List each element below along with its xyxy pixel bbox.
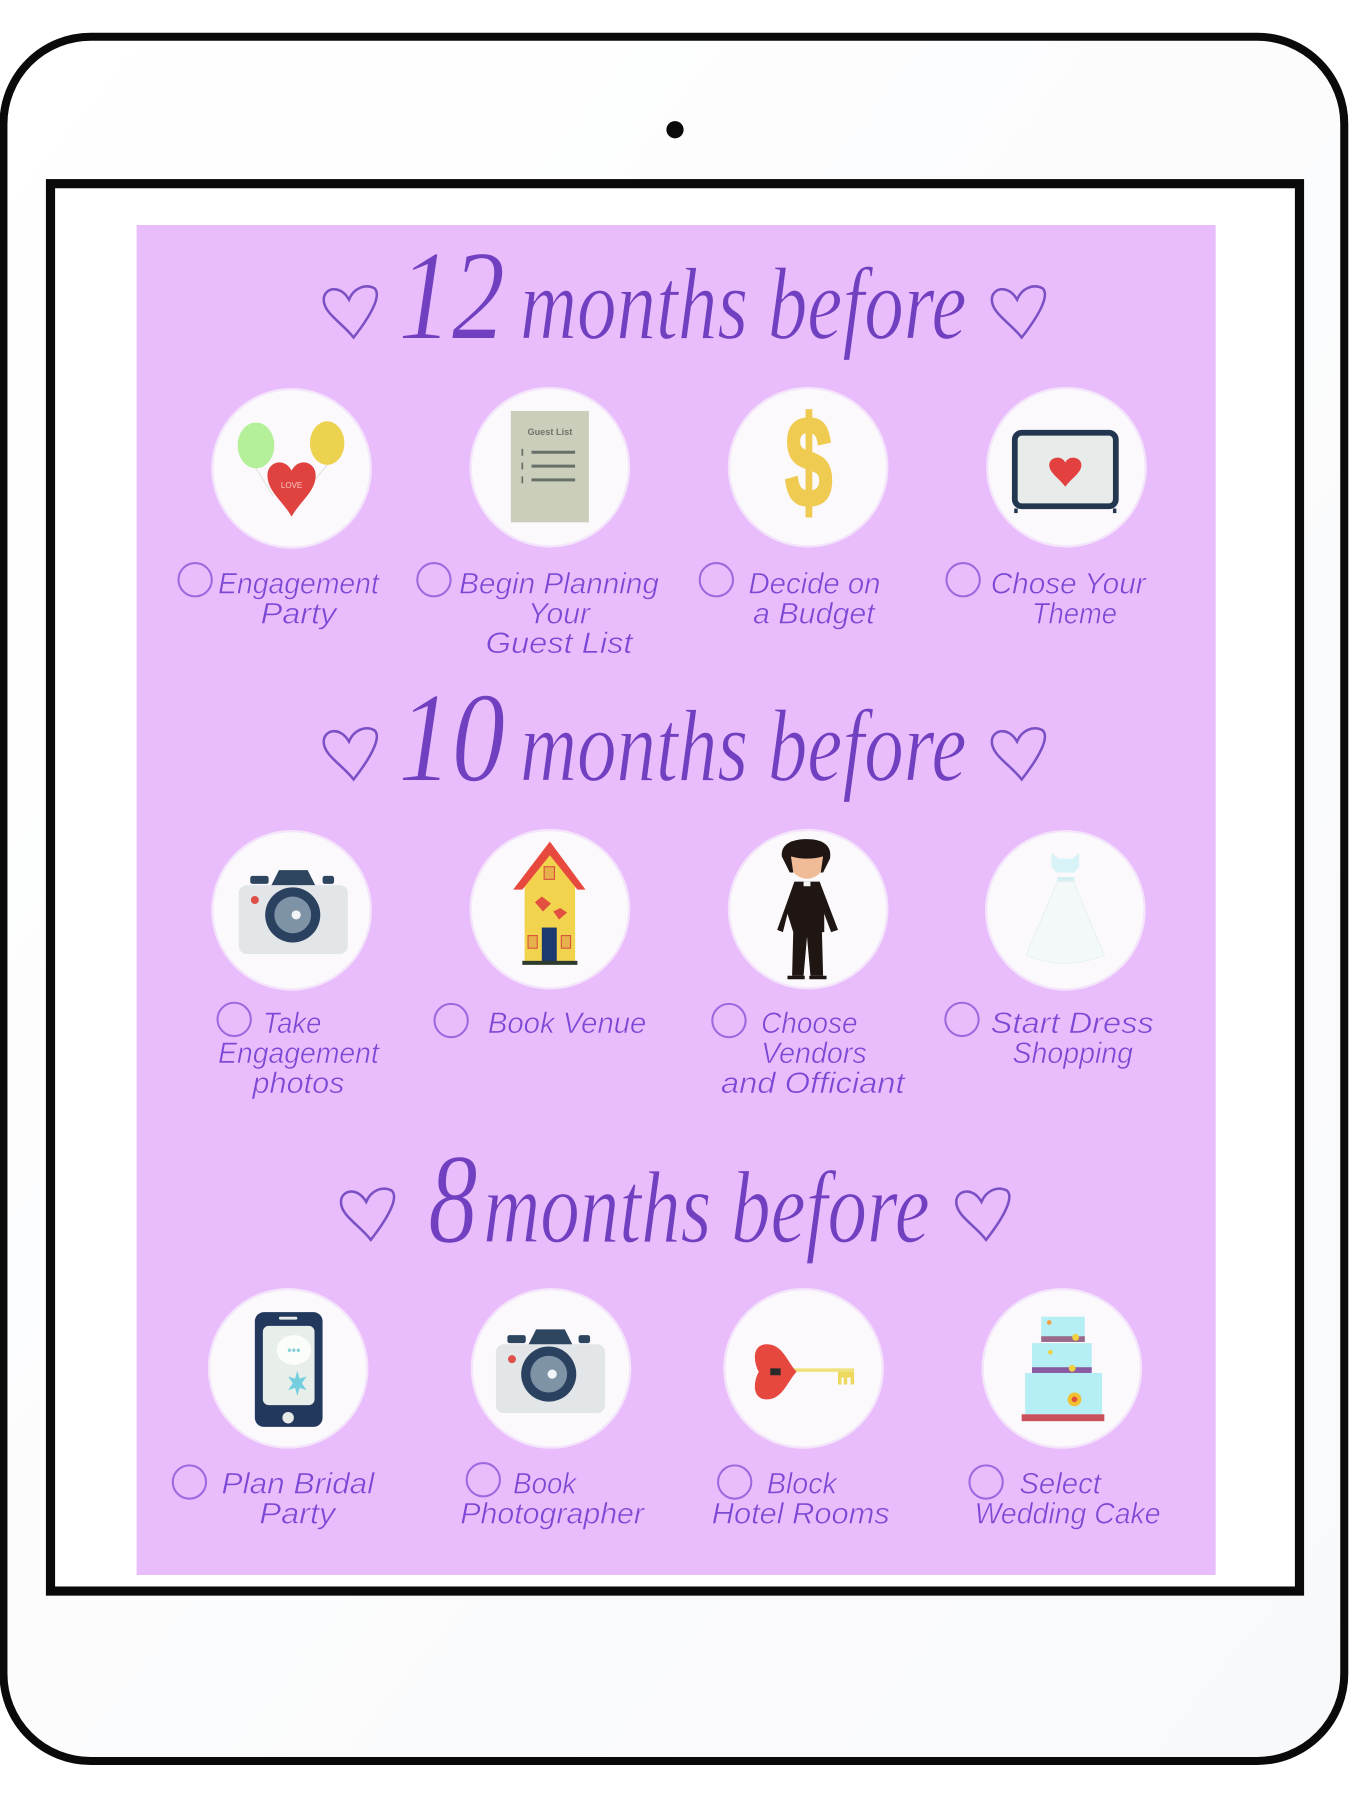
icon: screen with heart [1015, 433, 1116, 513]
heading: 12 months before [324, 224, 1045, 367]
item: engagement party [179, 389, 380, 630]
item: wedding cake [969, 1289, 1161, 1530]
heading: 8 months before: months before [483, 1151, 930, 1265]
heading: 8 months before: 8 [428, 1127, 478, 1270]
icon: house [513, 841, 585, 965]
item: engagement photos [212, 831, 380, 1100]
item: vendors and officiant [712, 830, 906, 1100]
icon: heart key [755, 1344, 854, 1399]
camera dot [666, 121, 684, 138]
tablet screen frame [51, 184, 1299, 1591]
item: dress shopping [945, 831, 1154, 1070]
icon: balloons [238, 421, 344, 517]
item: budget: a Budget [753, 597, 876, 630]
item: venue: Book Venue [488, 1007, 646, 1040]
item: theme: Chose Your [991, 567, 1147, 600]
icon: officiant figure [777, 839, 838, 979]
icon: camera [239, 870, 348, 954]
item: hotel rooms [712, 1289, 890, 1530]
heading: 10 months before: 10 [398, 666, 505, 809]
item: guest list: Begin Planning [459, 567, 659, 600]
item: dress shopping: Shopping [1013, 1037, 1133, 1070]
item: wedding cake: Select [1019, 1467, 1103, 1500]
icon: phone [255, 1312, 323, 1427]
section: 10 months before [212, 666, 1154, 1100]
item: hotel rooms: Hotel Rooms [712, 1497, 890, 1530]
item: engagement photos: photos [252, 1067, 344, 1100]
heading: 12 months before: 12 [398, 224, 505, 367]
item: engagement photos: Engagement [218, 1037, 380, 1070]
item: hotel rooms: Block [767, 1467, 839, 1500]
item: guest list: Guest List [486, 627, 634, 660]
item: photographer: Book [513, 1467, 578, 1500]
item: photographer [460, 1289, 645, 1530]
item: budget [700, 388, 887, 630]
panel: checklist background [137, 225, 1216, 1575]
section: 12 months before [179, 224, 1147, 660]
icon: wedding dress [1026, 853, 1104, 963]
heading: 8 months before [341, 1127, 1009, 1270]
icon: dollar sign: $ [785, 391, 832, 534]
item: budget: Decide on [748, 567, 880, 600]
item: dress shopping: Start Dress [991, 1007, 1154, 1040]
item: engagement party: Engagement [218, 567, 380, 600]
item: vendors and officiant: Vendors [761, 1037, 867, 1070]
item: engagement party: Party [261, 597, 339, 630]
icon: guest list: Guest List [527, 427, 572, 437]
item: guest list [417, 388, 659, 660]
item: guest list: Your [528, 597, 591, 630]
section: 8 months before [173, 1127, 1161, 1530]
item: bridal party: Party [259, 1497, 337, 1530]
item: vendors and officiant: and Officiant [721, 1067, 906, 1100]
item: bridal party [173, 1289, 376, 1530]
item: theme: Theme [1032, 597, 1117, 630]
heading: 10 months before [324, 666, 1045, 809]
icon: camera [496, 1329, 605, 1413]
icon: phone: ••• [287, 1344, 301, 1358]
icon: cake [1022, 1317, 1104, 1421]
item: vendors and officiant: Choose [761, 1007, 858, 1040]
item: photographer: Photographer [460, 1497, 645, 1530]
icon: guest list [511, 411, 589, 522]
heading: 12 months before: months before [520, 248, 967, 362]
item: bridal party: Plan Bridal [222, 1467, 376, 1500]
heading: 10 months before: months before [520, 690, 967, 804]
icon: balloons: LOVE [281, 481, 302, 490]
item: theme [946, 388, 1147, 630]
item: wedding cake: Wedding Cake [975, 1497, 1161, 1530]
item: engagement photos: Take [263, 1007, 321, 1040]
item: venue [435, 830, 646, 1040]
